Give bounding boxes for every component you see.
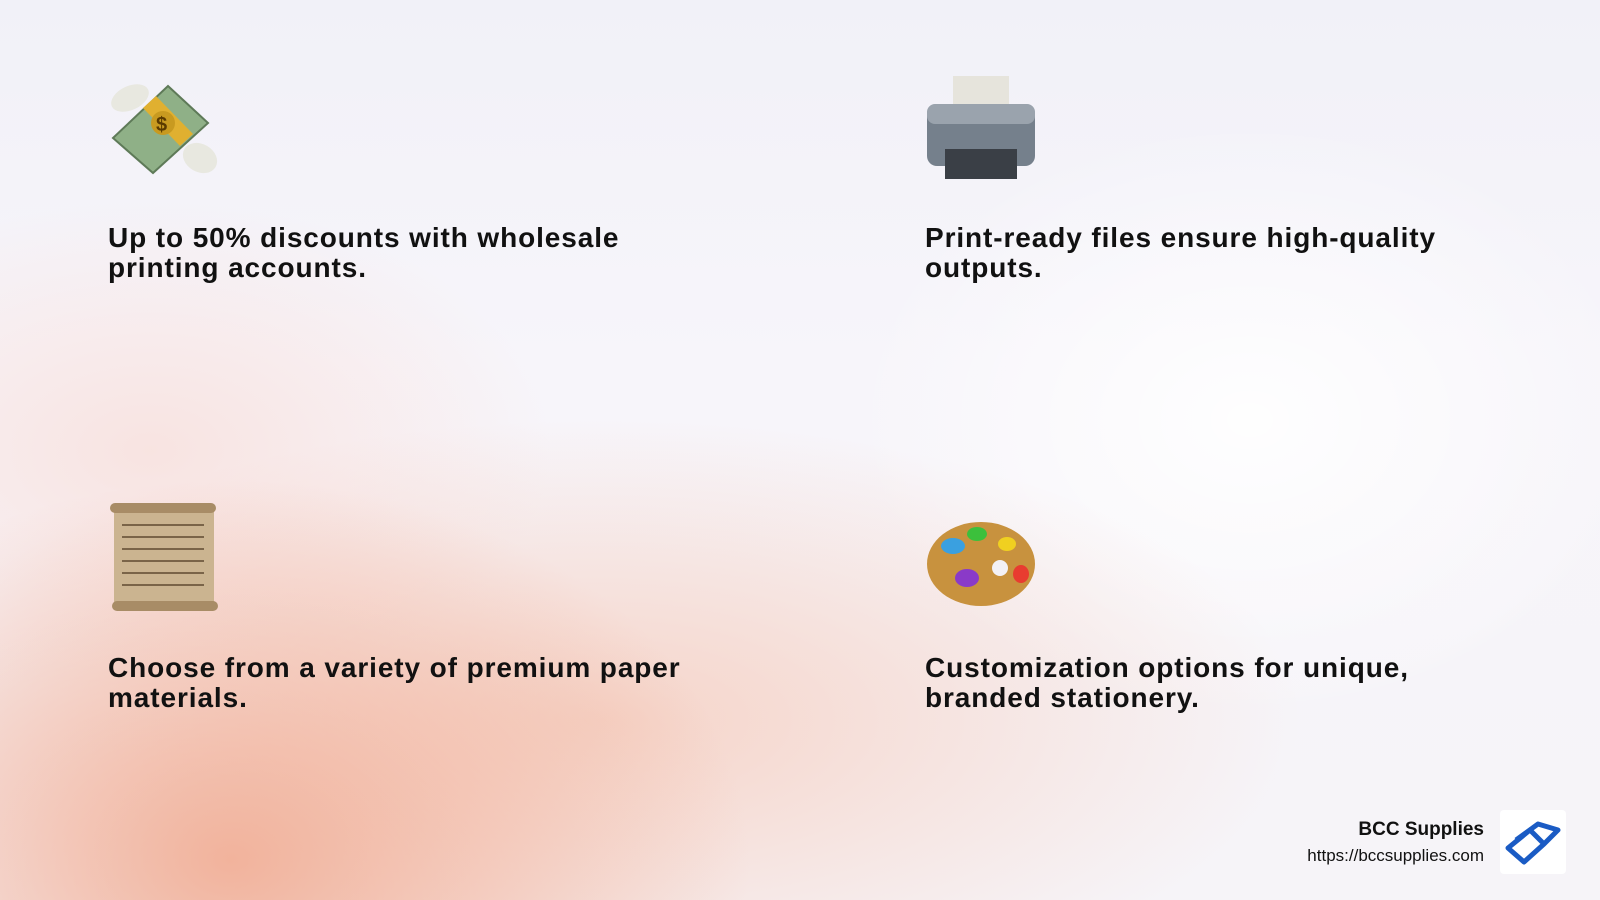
icon: palette [927,522,1035,606]
brand: BCC Supplies: https://bccsupplies.com [1307,846,1484,865]
text: paper materials: materials. [108,682,248,713]
icon: scroll [110,503,218,611]
text: paper materials: Choose from a variety of premium paper [108,652,681,683]
logo [1500,810,1566,874]
icon: printer [927,76,1035,179]
text: discounts: Up to 50% discounts with wholesale [108,222,619,253]
icon: flying money: $ [156,114,167,136]
text: print-ready: outputs. [925,252,1043,283]
text: customization: Customization options for unique, [925,652,1409,683]
text: customization [925,652,1409,713]
text: customization: branded stationery. [925,682,1200,713]
text: discounts [108,222,619,283]
text: print-ready [925,222,1436,283]
brand: BCC Supplies: BCC Supplies [1358,819,1484,840]
text: discounts: printing accounts. [108,252,367,283]
brand: BCC Supplies [1307,819,1484,865]
text: paper materials [108,652,681,713]
icon: flying money [111,84,217,174]
text: print-ready: Print-ready files ensure high-quality [925,222,1436,253]
